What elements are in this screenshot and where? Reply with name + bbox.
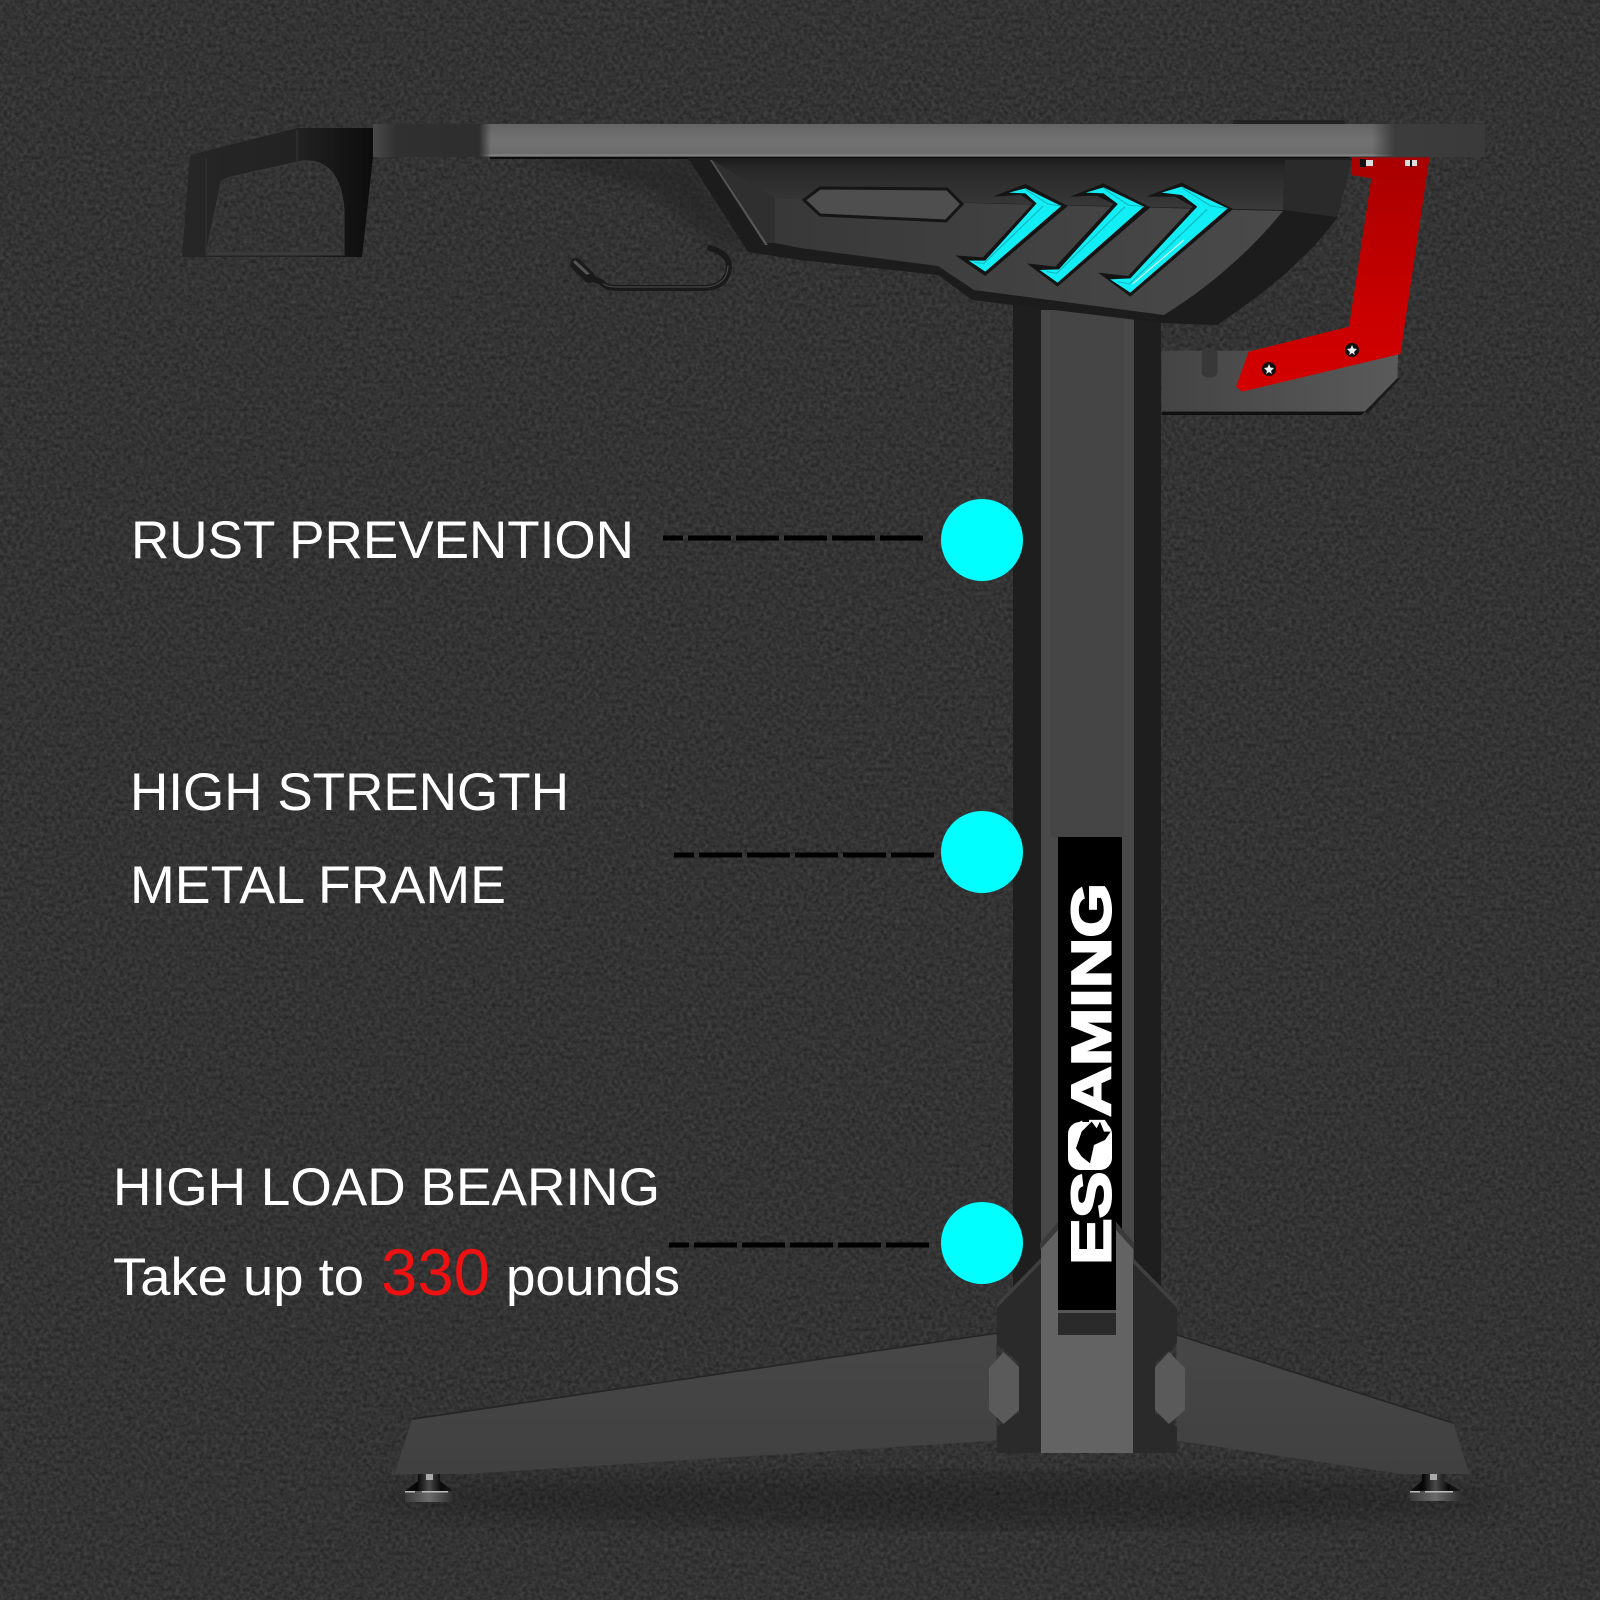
ESGAMING logo: ESGAMING bbox=[1060, 883, 1122, 1265]
label line 2 with red number: Take up to bbox=[113, 1248, 364, 1307]
light centre piece bbox=[1041, 1230, 1133, 1453]
headset hook bbox=[575, 248, 729, 288]
cyan marker bbox=[941, 811, 1023, 893]
black logo strip bbox=[1058, 837, 1122, 1242]
under-desk housing bbox=[688, 158, 1352, 325]
dashed leader line bbox=[663, 536, 924, 540]
dashed leader line bbox=[674, 852, 934, 858]
right adjustable foot bbox=[1410, 1474, 1461, 1501]
red and grey rear bracket plate bbox=[1162, 157, 1429, 415]
callout: rust prevention bbox=[131, 499, 1023, 581]
left hex plate bbox=[989, 1352, 1019, 1424]
label line 2 with red number: 330 bbox=[381, 1235, 490, 1309]
dashed leader line bbox=[669, 1242, 929, 1248]
eagle badge bbox=[1068, 1122, 1112, 1170]
left adjustable foot bbox=[405, 1474, 453, 1502]
label line 1: HIGH STRENGTH bbox=[130, 763, 569, 822]
floor shadow under the base bbox=[370, 1474, 1510, 1526]
label line 1: HIGH LOAD BEARING bbox=[113, 1158, 660, 1217]
cyan marker bbox=[941, 499, 1023, 581]
left T-leg foot arm bbox=[394, 1332, 996, 1474]
screws bbox=[1262, 159, 1417, 376]
cup holder bbox=[182, 128, 373, 257]
base housing bbox=[989, 1222, 1185, 1453]
chevron 3 bbox=[1098, 183, 1233, 297]
cyan marker bbox=[941, 1202, 1023, 1284]
hexagon badge bbox=[804, 188, 962, 221]
chevron 1 bbox=[955, 184, 1068, 276]
cyan LED chevrons bbox=[955, 183, 1233, 297]
slot in centre piece bbox=[1058, 1230, 1116, 1335]
right T-leg foot arm bbox=[1176, 1334, 1469, 1474]
callout: high load bearing bbox=[113, 1158, 1023, 1309]
soft shadow under the tabletop bbox=[520, 157, 748, 252]
tabletop bbox=[373, 120, 1485, 159]
callout: high strength metal frame bbox=[130, 763, 1023, 915]
label line 2: METAL FRAME bbox=[130, 856, 506, 915]
right hex plate bbox=[1155, 1352, 1185, 1424]
vertical column bbox=[1013, 305, 1161, 1305]
label line 2 with red number: pounds bbox=[506, 1248, 680, 1307]
label: RUST PREVENTION bbox=[131, 511, 634, 570]
chevron 2 bbox=[1027, 183, 1150, 287]
desk frame bbox=[182, 120, 1485, 1502]
